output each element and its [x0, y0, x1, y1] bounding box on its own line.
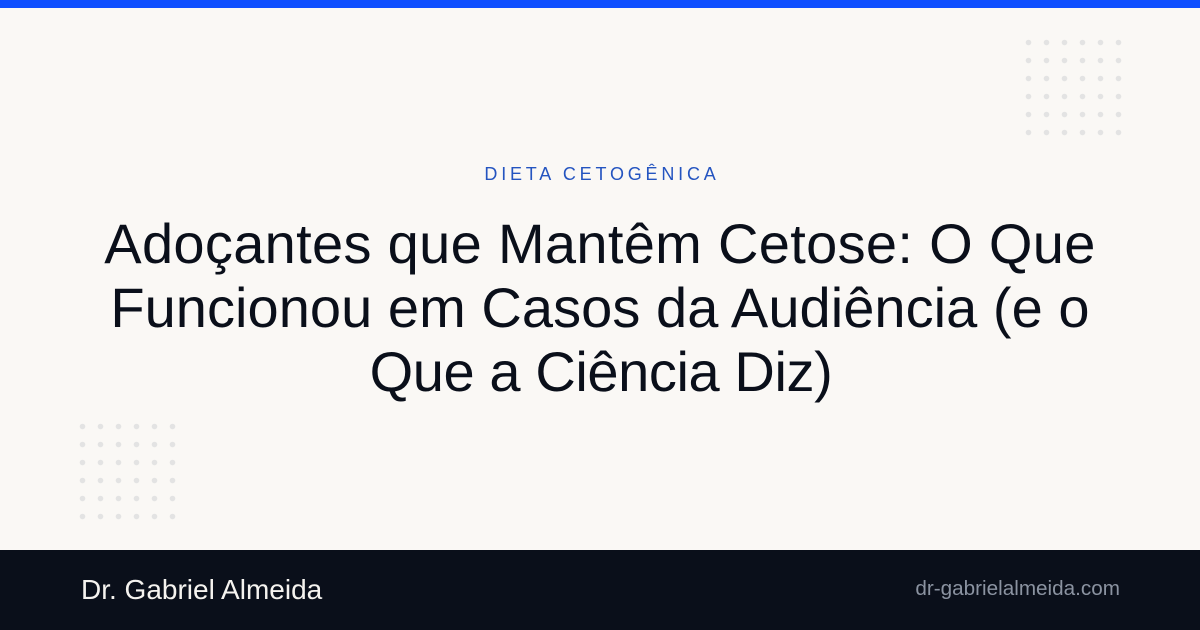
title: Adoçantes que Mantêm Cetose: O Que	[104, 212, 1096, 275]
dot pattern: bottom left	[80, 424, 176, 520]
category label: DIETA CETOGÊNICA	[484, 164, 720, 184]
footer bar	[0, 550, 1200, 630]
website: dr-gabrielalmeida.com	[915, 577, 1120, 600]
title: Funcionou em Casos da Audiência (e o	[110, 276, 1090, 339]
dot pattern: top right	[1026, 40, 1122, 136]
author name: Dr. Gabriel Almeida	[81, 574, 322, 605]
title: Que a Ciência Diz)	[370, 340, 832, 403]
top accent bar	[0, 0, 1200, 8]
title	[104, 212, 1096, 403]
